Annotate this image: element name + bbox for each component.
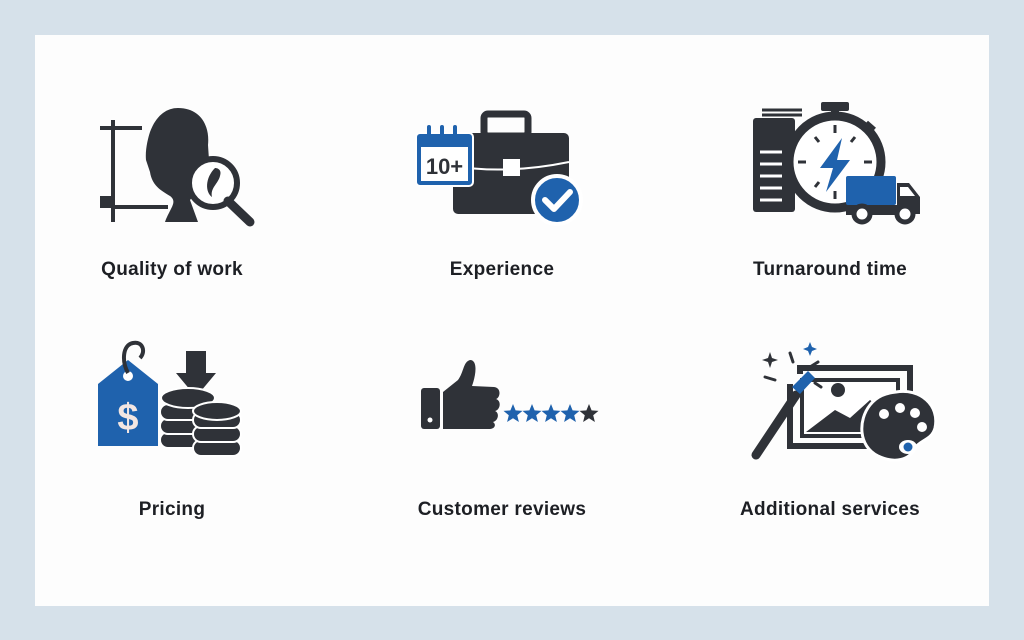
icon: turnaround time — [753, 102, 920, 222]
label: experience: Experience — [450, 259, 554, 280]
icon: pricing: $ — [117, 397, 139, 439]
icon: customer reviews — [421, 360, 598, 429]
label: customer reviews: Customer reviews — [418, 499, 586, 520]
icon: additional services — [756, 342, 936, 460]
label: additional services: Additional services — [740, 499, 920, 520]
label: pricing: Pricing — [139, 499, 205, 520]
icon: experience — [416, 114, 581, 224]
icon: experience: 10+ — [426, 154, 463, 179]
icon: quality of work — [100, 108, 250, 222]
label: turnaround time: Turnaround time — [753, 259, 907, 280]
label: quality of work: Quality of work — [101, 259, 243, 280]
icon: pricing — [98, 343, 241, 456]
